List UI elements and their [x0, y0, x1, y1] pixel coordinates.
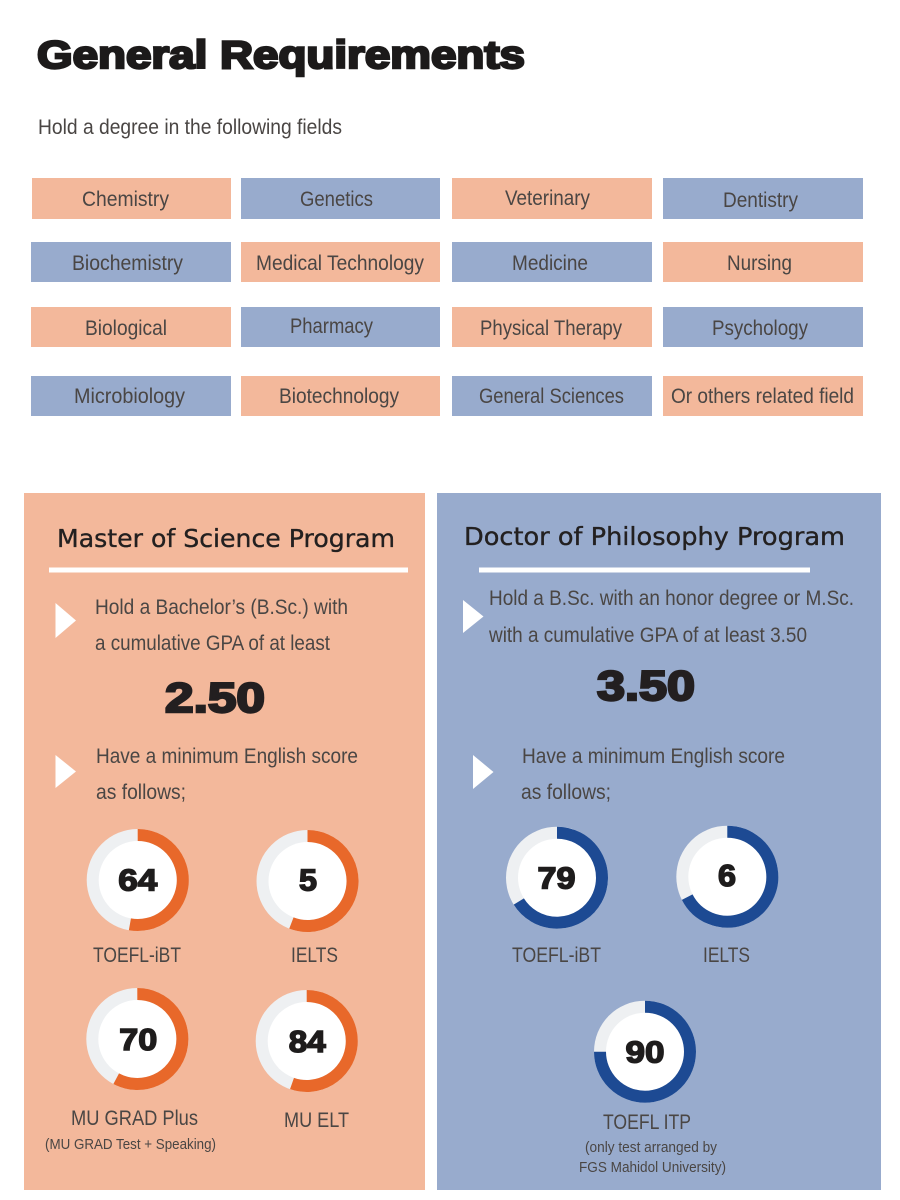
score donut: IELTS 6 — [676, 826, 778, 928]
label: TOEFL ITP — [579, 1111, 726, 1176]
intro text: Hold a degree in the following fields — [38, 116, 342, 139]
tile: Nursing: Nursing — [727, 252, 792, 275]
label: TOEFL ITP: (only test arranged by — [585, 1139, 717, 1156]
GPA requirement text: Hold a B.Sc. with an honor degree or M.Sc. — [489, 587, 854, 610]
tile: Nursing — [663, 242, 863, 282]
icon: bullet arrow English — [56, 755, 76, 788]
score donut: IELTS 5 — [256, 830, 358, 932]
tile: Pharmacy: Pharmacy — [290, 315, 373, 338]
label: TOEFL ITP: FGS Mahidol University) — [579, 1159, 726, 1176]
icon: bullet arrow GPA — [463, 600, 484, 633]
heading: Master of Science Program: Master of Science Program — [57, 524, 395, 553]
tile: Or others related field: Or others related field — [671, 385, 854, 408]
tile: General Sciences — [452, 376, 652, 416]
score donut: IELTS 6: 6 — [718, 858, 736, 893]
label: TOEFL-iBT: TOEFL-iBT — [512, 944, 601, 967]
GPA requirement text: with a cumulative GPA of at least 3.50 — [488, 624, 807, 647]
English requirement text: as follows; — [521, 781, 611, 804]
label: TOEFL ITP: TOEFL ITP — [603, 1111, 691, 1134]
tile: Genetics: Genetics — [300, 188, 373, 211]
tile: Biological — [31, 307, 231, 347]
GPA requirement text — [488, 587, 854, 647]
English requirement text: as follows; — [96, 781, 186, 804]
label: TOEFL-iBT: TOEFL-iBT — [93, 944, 181, 967]
GPA value 2.50: 2.50 — [165, 674, 265, 721]
title: General Requirements — [37, 34, 525, 77]
tile: Biochemistry: Biochemistry — [72, 252, 183, 275]
label: MU GRAD Plus: MU GRAD Plus — [71, 1107, 198, 1130]
icon: bullet arrow English — [473, 755, 494, 789]
tile: Medicine: Medicine — [512, 252, 588, 275]
tile: Dentistry: Dentistry — [723, 189, 798, 212]
score donut: TOEFL ITP 90: 90 — [626, 1035, 664, 1070]
tile: Biological: Biological — [85, 317, 167, 340]
English requirement text — [96, 745, 358, 804]
GPA requirement text: a cumulative GPA of at least — [95, 632, 330, 655]
tile: General Sciences: General Sciences — [479, 385, 624, 408]
tile: Biotechnology — [241, 376, 440, 416]
tile: Veterinary — [452, 178, 652, 219]
score donut: MU ELT 84 — [256, 990, 358, 1092]
tile: Pharmacy — [241, 307, 440, 347]
tile: Medical Technology: Medical Technology — [256, 252, 424, 275]
score donut: TOEFL-iBT 64: 64 — [118, 862, 158, 898]
GPA requirement text — [95, 596, 348, 655]
tile: Microbiology — [31, 376, 231, 416]
score donut: MU GRAD Plus 70 — [86, 988, 188, 1090]
GPA requirement text: Hold a Bachelor’s (B.Sc.) with — [95, 596, 348, 619]
English requirement text: Have a minimum English score — [522, 745, 785, 768]
panel: Master of Science Program — [24, 493, 425, 1190]
label: MU GRAD Plus: (MU GRAD Test + Speaking) — [45, 1136, 216, 1153]
score donut: TOEFL-iBT 79: 79 — [538, 861, 576, 896]
score donut: TOEFL-iBT 79 — [506, 827, 608, 929]
score donut: TOEFL-iBT 64 — [87, 829, 189, 931]
label: IELTS: IELTS — [291, 944, 338, 967]
tile: Veterinary: Veterinary — [505, 187, 590, 210]
GPA value 3.50: 3.50 — [597, 662, 695, 709]
tile: Medicine — [452, 242, 652, 282]
tile: Physical Therapy — [452, 307, 652, 347]
English requirement text — [521, 745, 785, 804]
icon: bullet arrow GPA — [56, 603, 76, 638]
score donut: IELTS 5: 5 — [299, 862, 317, 898]
tile: Psychology — [663, 307, 863, 347]
heading: Doctor of Philosophy Program: Doctor of Philosophy Program — [464, 522, 845, 551]
tile: Medical Technology — [241, 242, 440, 282]
tile: Chemistry — [32, 178, 231, 219]
label: MU ELT: MU ELT — [284, 1109, 349, 1132]
tile: Biochemistry — [31, 242, 231, 282]
tile: Microbiology: Microbiology — [74, 385, 185, 408]
tile: Physical Therapy: Physical Therapy — [480, 317, 622, 340]
tile: Genetics — [241, 178, 440, 219]
score donut: MU GRAD Plus 70: 70 — [119, 1022, 157, 1057]
score donut: MU ELT 84: 84 — [289, 1024, 327, 1059]
tile: Dentistry — [663, 178, 863, 219]
label: IELTS: IELTS — [703, 944, 750, 967]
panel: fields of study — [31, 178, 863, 416]
tile: Biotechnology: Biotechnology — [279, 385, 399, 408]
tile: Chemistry: Chemistry — [82, 188, 169, 211]
tile: Psychology: Psychology — [712, 317, 808, 340]
score donut: TOEFL ITP 90 — [594, 1001, 696, 1103]
panel: Doctor of Philosophy Program — [437, 493, 881, 1190]
English requirement text: Have a minimum English score — [96, 745, 358, 768]
label: MU GRAD Plus — [45, 1107, 216, 1153]
tile: Or others related field — [663, 376, 863, 416]
